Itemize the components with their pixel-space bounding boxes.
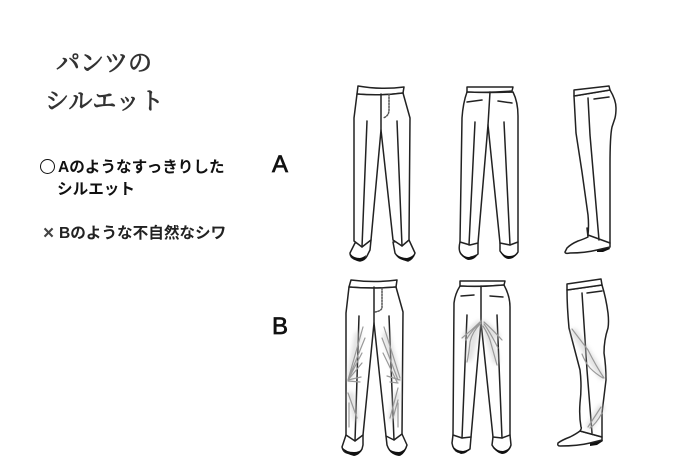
pants A side	[565, 86, 616, 253]
circle mark	[40, 159, 55, 174]
title line 1: パンツの	[56, 51, 152, 77]
wrinkles	[462, 321, 502, 365]
pants B side	[558, 279, 608, 446]
bad silhouette note: ×	[43, 223, 54, 244]
wrinkles	[348, 327, 400, 427]
bad silhouette note: Bのような不自然なシワ	[59, 225, 226, 242]
pants A front	[350, 86, 415, 261]
wrinkles	[572, 329, 604, 428]
good silhouette note: シルエット	[57, 181, 135, 198]
good silhouette note: Aのようなすっきりした	[58, 159, 225, 176]
pants B front	[342, 280, 407, 456]
pants B back	[452, 281, 511, 454]
pants A back	[459, 87, 518, 260]
label B: B	[272, 313, 288, 340]
label A: A	[272, 151, 288, 178]
good silhouette note	[40, 159, 225, 198]
title line 2: シルエット	[45, 89, 164, 115]
